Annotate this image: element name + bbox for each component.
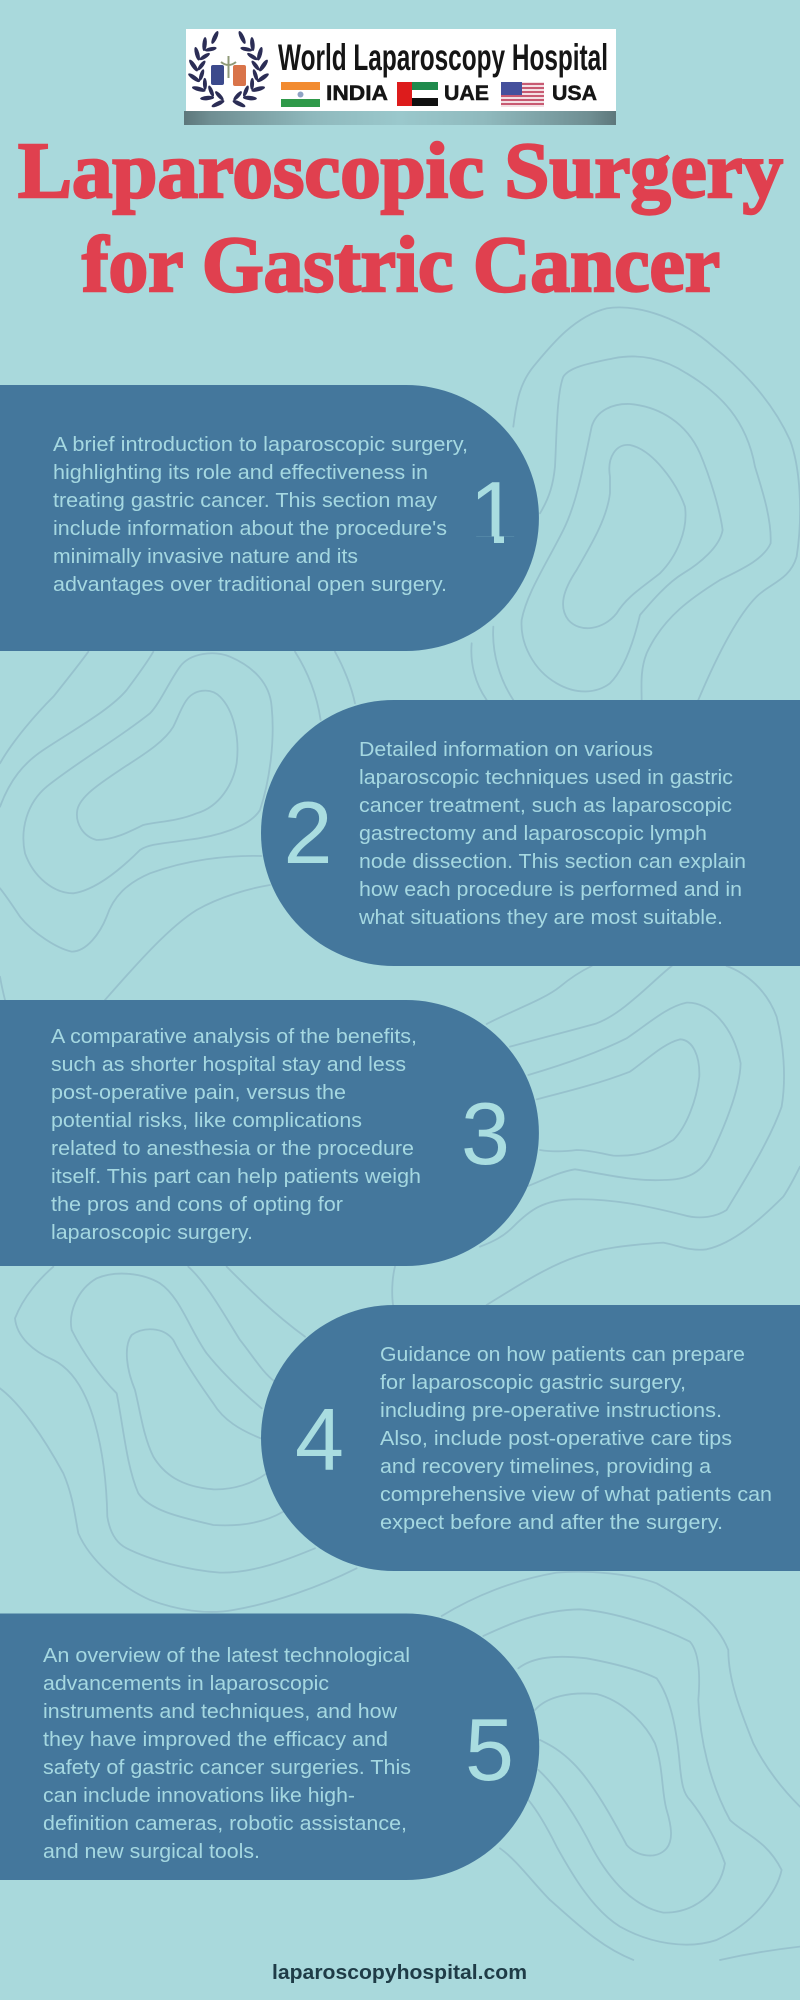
text block: step 3: laparoscopic surgery. — [51, 1221, 253, 1244]
text block: step 5: advancements in laparoscopic — [43, 1672, 329, 1695]
text block: step 2: node dissection. This section can explain — [359, 850, 746, 873]
title — [18, 128, 783, 309]
text block: step 5: and new surgical tools. — [43, 1840, 260, 1863]
text block: step 4: for laparoscopic gastric surgery, — [380, 1371, 686, 1394]
logo shadow — [184, 111, 616, 125]
text block: step 3: itself. This part can help patients weigh — [51, 1165, 421, 1188]
contour pattern: lower left — [0, 1267, 395, 1612]
text block: step 4: and recovery timelines, providing a — [380, 1455, 712, 1478]
country label: UAE: UAE — [444, 82, 489, 105]
text block: step 1: highlighting its role and effectiveness in — [53, 461, 428, 484]
text block: step 2: gastrectomy and laparoscopic lymph — [359, 822, 707, 845]
icon: India flag — [281, 82, 320, 107]
text block: step 5 — [43, 1644, 411, 1863]
text block: step 5: instruments and techniques, and how — [43, 1700, 397, 1723]
text block: step 4: Guidance on how patients can prepare — [380, 1343, 745, 1366]
text block: step 5: definition cameras, robotic assistance, — [43, 1812, 407, 1835]
logo name text: World Laparoscopy Hospital — [278, 37, 608, 78]
text block: step 3: such as shorter hospital stay and less — [51, 1053, 406, 1076]
text block: step 2 — [358, 738, 746, 929]
footer url: laparoscopyhospital.com — [272, 1962, 527, 1984]
icon: UAE flag — [397, 82, 438, 106]
text block: step 3: potential risks, like complications — [51, 1109, 362, 1132]
text block: step 2: laparoscopic techniques used in gastric — [359, 766, 733, 789]
title: for Gastric Cancer — [82, 222, 720, 309]
logo white plate — [186, 29, 616, 111]
text block: step 4: including pre-operative instructions. — [380, 1399, 722, 1422]
text block: step 5: safety of gastric cancer surgeries. This — [43, 1756, 411, 1779]
number 3: 3 — [461, 1084, 510, 1183]
text block: step 3: related to anesthesia or the procedure — [51, 1137, 414, 1160]
icon: USA flag — [501, 82, 544, 107]
text block: step 4: Also, include post-operative care tips — [380, 1427, 732, 1450]
text block: step 4: expect before and after the surgery. — [380, 1511, 723, 1534]
number 1: 1 — [470, 463, 518, 562]
text block: step 4 — [380, 1343, 772, 1534]
text block: step 5: can include innovations like high- — [43, 1784, 355, 1807]
country label: India: INDIA — [326, 82, 388, 105]
text block: step 3 — [51, 1025, 421, 1244]
logo banner — [184, 29, 616, 125]
text block: step 1: include information about the procedure's — [53, 517, 447, 540]
text block: step 3: post-operative pain, versus the — [51, 1081, 346, 1104]
text block: step 3: A comparative analysis of the benefits, — [51, 1025, 417, 1048]
title: Laparoscopic Surgery — [18, 128, 783, 215]
panel: step 4 — [261, 1305, 800, 1571]
text block: step 2: how each procedure is performed and in — [359, 878, 742, 901]
panel: step 5 — [0, 1614, 539, 1880]
contour pattern: centre right — [480, 966, 800, 1305]
number 2: 2 — [284, 783, 332, 882]
text block: step 2: Detailed information on various — [359, 738, 653, 761]
panel: step 2 — [261, 700, 800, 966]
contour pattern: bottom right — [442, 1572, 800, 1960]
text block: step 3: the pros and cons of opting for — [51, 1193, 343, 1216]
text block: step 1 — [53, 433, 468, 596]
text block: step 1: treating gastric cancer. This section may — [53, 489, 438, 512]
number 4: 4 — [295, 1390, 344, 1489]
text block: step 2: cancer treatment, such as laparoscopic — [359, 794, 732, 817]
text block: step 1: A brief introduction to laparoscopic surgery, — [53, 433, 468, 456]
country label: USA: USA — [552, 82, 597, 105]
panel: step 1 — [0, 385, 539, 651]
icon: laurel wreath emblem — [186, 29, 271, 111]
number 5: 5 — [465, 1700, 514, 1799]
text block: step 5: they have improved the efficacy and — [43, 1728, 388, 1751]
contour pattern: top right — [471, 307, 800, 700]
text block: step 2: what situations they are most suitable. — [358, 906, 723, 929]
text block: step 4: comprehensive view of what patients can — [380, 1483, 772, 1506]
text block: step 1: minimally invasive nature and its — [53, 545, 358, 568]
contour pattern: middle left — [0, 652, 355, 1000]
text block: step 5: An overview of the latest technological — [43, 1644, 410, 1667]
text block: step 1: advantages over traditional open surgery. — [53, 573, 447, 596]
panel: step 3 — [0, 1000, 539, 1266]
